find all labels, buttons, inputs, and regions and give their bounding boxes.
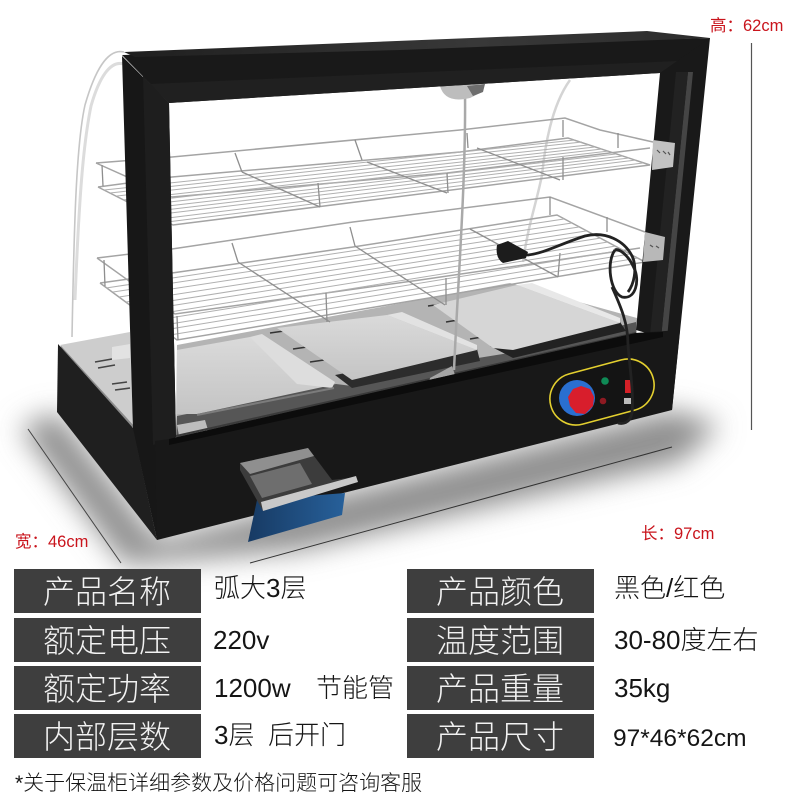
tray: middle xyxy=(277,304,482,388)
spec row 2: 温度范围 xyxy=(436,623,564,659)
top beam xyxy=(122,38,710,103)
power cord and plug xyxy=(497,235,637,423)
dimension line: width xyxy=(28,429,121,563)
spec row 3 xyxy=(14,666,670,710)
dimension label: width: 宽：46cm xyxy=(15,532,88,551)
spec row 3: 节能管 xyxy=(316,673,394,703)
door centre edge and lamp xyxy=(428,84,485,386)
spec row 1: 产品名称 xyxy=(43,574,171,610)
spec row 2: 额定电压 xyxy=(43,623,171,659)
spec row 4: 产品尺寸 xyxy=(436,719,564,755)
upper wire shelf xyxy=(96,118,653,225)
spec row 2 xyxy=(14,618,758,662)
cabinet base xyxy=(57,330,680,540)
spec row 4 xyxy=(14,714,746,758)
drawer xyxy=(240,448,358,542)
spec row 1: 黑色/红色 xyxy=(614,573,725,603)
control panel xyxy=(544,353,660,431)
spec row 3: 额定功率 xyxy=(43,671,171,707)
spec row 1: 产品颜色 xyxy=(436,574,564,610)
tray: left, seen through side glass xyxy=(60,332,133,427)
shelf brackets xyxy=(643,140,675,262)
right post xyxy=(636,38,710,410)
spec row 4: 3层 xyxy=(214,720,254,750)
tray: front left xyxy=(177,331,335,436)
dimension line: length xyxy=(250,447,672,563)
spec row 4: 后开门 xyxy=(268,720,346,750)
left post xyxy=(122,56,176,540)
curved side glass xyxy=(72,52,570,337)
spec row 1: 弧大3层 xyxy=(214,573,306,603)
cabinet frame xyxy=(122,31,710,540)
top surface xyxy=(124,31,710,57)
floor shadow xyxy=(20,410,720,565)
spec row 1 xyxy=(14,569,725,613)
spec row 2: 220v xyxy=(213,625,269,655)
spec row 3: 35kg xyxy=(614,673,670,703)
dimension label: height: 高：62cm xyxy=(710,16,783,35)
spec row 3: 1200w xyxy=(214,673,291,703)
spec row 2: 30-80度左右 xyxy=(614,625,758,655)
interior base with trays xyxy=(60,283,637,440)
footnote: *关于保温柜详细参数及价格问题可咨询客服 xyxy=(15,772,422,795)
spec row 3: 产品重量 xyxy=(436,671,564,707)
lower wire shelf xyxy=(97,197,645,340)
tray: right xyxy=(433,283,626,358)
dimension label: length: 长：97cm xyxy=(641,524,714,543)
spec row 4: 内部层数 xyxy=(43,719,171,755)
spec row 4: 97*46*62cm xyxy=(613,725,746,752)
dimension line: height xyxy=(750,43,752,430)
